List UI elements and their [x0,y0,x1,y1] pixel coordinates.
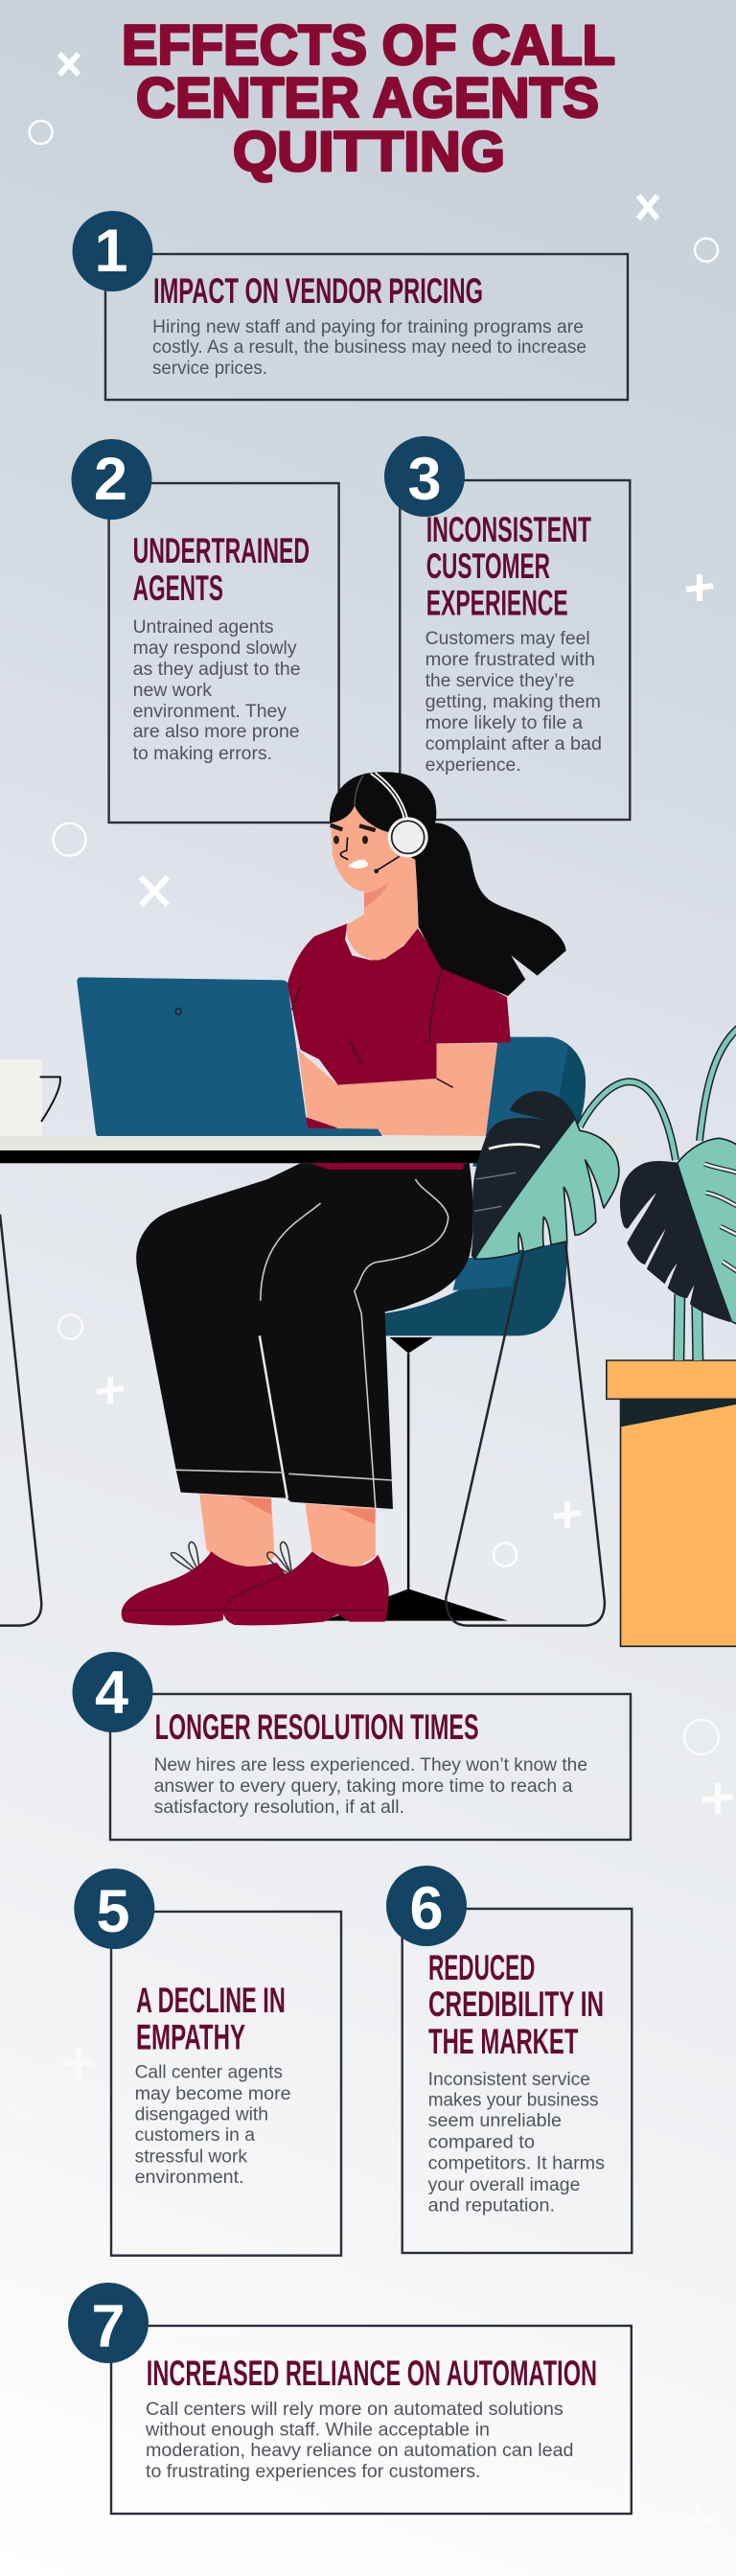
panel: undertrained agents: to making errors. [133,744,272,764]
panel: reduced credibility in the market: your overall image [428,2175,580,2195]
panel: undertrained agents: as they adjust to the [133,660,301,680]
title: EFFECTS OF CALL [122,14,615,77]
head, hair and headset [330,772,566,996]
panel: longer resolution times: 4 [95,1659,128,1727]
plant pot [607,1360,736,1646]
chair back [472,1037,586,1172]
panel: impact on vendor pricing: service prices. [152,359,267,379]
panel: inconsistent customer experience: CUSTOMER [426,546,550,586]
panel: reduced credibility in the market: and reputation. [428,2196,555,2216]
panel: increased reliance on automation: Call centers will rely more on automated solutions [146,2400,564,2420]
panel: inconsistent customer experience: 3 [407,446,442,513]
panel: a decline in empathy: environment. [135,2168,244,2188]
panel: undertrained agents: environment. They [133,702,288,722]
panel: reduced credibility in the market [386,1866,632,2253]
panel: increased reliance on automation: without enough staff. While acceptable in [145,2421,490,2441]
panel: inconsistent customer experience: getting, making them [426,692,601,712]
panel: a decline in empathy: EMPATHY [136,2018,245,2057]
title: CENTER AGENTS [136,67,599,129]
illustration: call center agent at desk [0,772,736,1646]
panel: undertrained agents: new work [133,681,213,701]
panel: inconsistent customer experience: INCONSISTENT [426,510,591,549]
panel: increased reliance on automation: 7 [91,2293,126,2360]
panel: a decline in empathy: disengaged with [135,2105,268,2125]
panel: a decline in empathy: customers in a [135,2125,255,2146]
panel: impact on vendor pricing: Hiring new staff and paying for training programs are [152,317,584,337]
panel: undertrained agents: UNDERTRAINED [133,531,310,570]
panel: inconsistent customer experience [384,436,630,820]
panel: a decline in empathy: may become more [135,2084,291,2104]
panel: longer resolution times: LONGER RESOLUTION TIMES [155,1707,479,1747]
panel: reduced credibility in the market: compared to [428,2133,535,2153]
panel: inconsistent customer experience: experience. [426,755,521,776]
desk and mug [0,1059,629,1170]
panel: undertrained agents [71,439,339,823]
panel: undertrained agents: are also more prone [133,722,300,742]
panel: longer resolution times: answer to every query, taking more time to reach a [154,1776,573,1797]
panel: a decline in empathy: stressful work [135,2147,247,2168]
panel: inconsistent customer experience: Customers may feel [426,629,590,649]
panel: impact on vendor pricing [73,211,628,400]
panel: inconsistent customer experience: complaint after a bad [426,734,602,754]
panel: impact on vendor pricing: costly. As a result, the business may need to increase [152,337,586,358]
panel: inconsistent customer experience: the service they’re [426,671,575,691]
panel: longer resolution times [73,1652,631,1840]
title: QUITTING [233,121,505,183]
panel: increased reliance on automation: to frustrating experiences for customers. [146,2462,481,2482]
panel: undertrained agents: AGENTS [133,569,223,608]
trousers [136,1163,473,1509]
panel: reduced credibility in the market: Inconsistent service [428,2070,590,2090]
panel: inconsistent customer experience: more frustrated with [426,650,595,670]
leaves and stems [472,1026,736,1360]
panel: impact on vendor pricing: 1 [94,218,128,285]
panel: a decline in empathy [74,1868,341,2256]
torso and arms [288,923,511,1136]
laptop [77,977,382,1137]
panel: reduced credibility in the market: competitors. It harms [428,2154,605,2174]
panel: reduced credibility in the market: makes your business [428,2091,598,2111]
panel: a decline in empathy: A DECLINE IN [136,1981,286,2020]
panel: increased reliance on automation [68,2283,632,2514]
panel: undertrained agents: may respond slowly [133,638,297,659]
panel: reduced credibility in the market: REDUCED [428,1948,535,1987]
legs and shoes [122,1494,389,1625]
panel: inconsistent customer experience: EXPERIENCE [426,584,568,623]
panel: reduced credibility in the market: CREDIBILITY IN [428,1984,604,2024]
panel: a decline in empathy: 5 [96,1878,130,1945]
panel: longer resolution times: satisfactory resolution, if at all. [154,1798,404,1818]
panel: a decline in empathy: Call center agents [135,2063,283,2083]
panel: inconsistent customer experience: more likely to file a [426,713,583,733]
panel: undertrained agents: Untrained agents [133,617,274,638]
panel: longer resolution times: New hires are less experienced. They won’t know the [154,1755,587,1775]
panel: reduced credibility in the market: seem unreliable [428,2111,562,2131]
panel: reduced credibility in the market: THE MARKET [428,2022,579,2061]
potted plant [472,1026,736,1646]
panel: increased reliance on automation: moderation, heavy reliance on automation can lead [146,2441,573,2461]
panel: impact on vendor pricing: IMPACT ON VENDOR PRICING [153,271,483,311]
chair seat and stand [0,1215,605,1626]
panel: undertrained agents: 2 [94,446,127,513]
panel: reduced credibility in the market: 6 [409,1875,444,1942]
title [122,14,615,183]
